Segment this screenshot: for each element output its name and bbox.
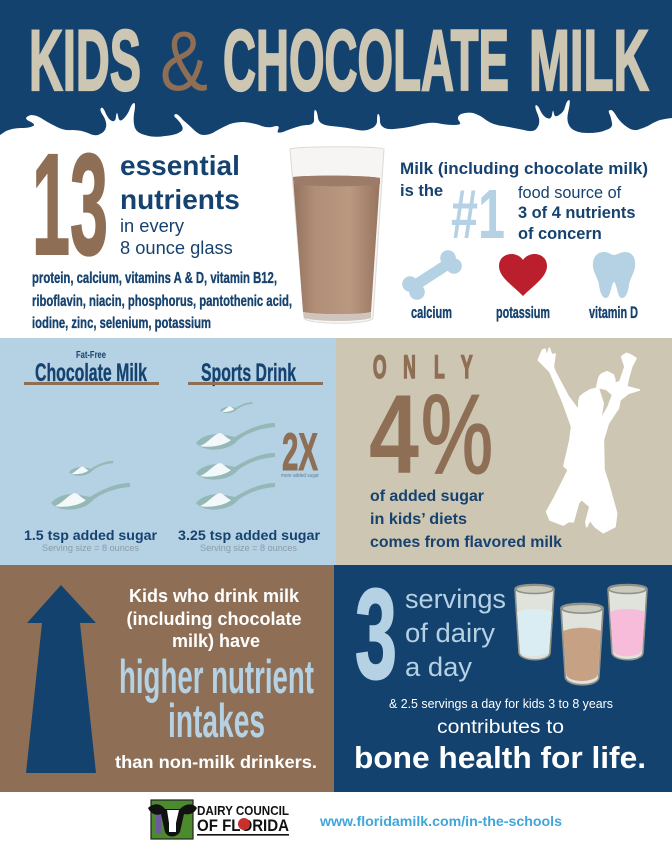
- text: serving note: & 2.5 servings a day for kids 3 to 8 years: [389, 697, 613, 711]
- panel: 13 essential nutrients: 13: [32, 124, 108, 285]
- text: kids who drink milk: (including chocolate: [126, 609, 302, 629]
- subheading: in every 8 ounce glass: [120, 215, 233, 258]
- text: contributes to: contributes to: [437, 717, 564, 738]
- text: added sugar statement: [370, 488, 562, 551]
- icon: up arrow: [26, 585, 96, 773]
- logo: Dairy Council of Florida: [148, 800, 289, 839]
- panel: number one food source: [400, 160, 648, 322]
- logo: Dairy Council of Florida: OF FLORIDA: [197, 816, 289, 835]
- icon: glass of strawberry milk: [608, 584, 647, 660]
- nutrient list: protein, calcium, vitamins A & D, vitamin B12,: [32, 270, 277, 287]
- callout: 2X more added sugar: more added sugar: [281, 473, 319, 479]
- heading: only: ONLY: [373, 351, 473, 385]
- logo: Dairy Council of Florida: DAIRY COUNCIL: [197, 803, 289, 818]
- label: potassium: potassium: [496, 304, 550, 322]
- heading: chocolate milk: Fat-Free: [76, 349, 106, 361]
- callout text: milk is the: [400, 160, 648, 200]
- title: [29, 13, 649, 109]
- heading: chocolate milk: [24, 349, 159, 387]
- text: servings of dairy a day: of dairy: [405, 618, 496, 648]
- highlight: higher nutrient intakes: higher nutrient: [119, 650, 314, 703]
- callout: 2X more added sugar: 2X: [282, 423, 318, 482]
- text: 1.5 tsp: Serving size = 8 ounces: [42, 543, 139, 554]
- text: 3.25 tsp: Serving size = 8 ounces: [200, 543, 297, 554]
- nutrient list: [32, 270, 292, 332]
- heading: essential nutrients: [120, 150, 240, 215]
- subheading: in every 8 ounce glass: 8 ounce glass: [120, 237, 233, 258]
- text: servings of dairy a day: servings: [405, 584, 506, 614]
- text: added sugar statement: in kids’ diets: [370, 511, 467, 528]
- icon: sports drink spoons: [196, 402, 275, 510]
- text: kids who drink milk: Kids who drink milk: [129, 586, 300, 606]
- header banner: [0, 0, 672, 142]
- callout: 2X more added sugar: [281, 423, 319, 482]
- text: servings of dairy a day: [405, 584, 506, 682]
- icon: chocolate milk spoons: [51, 461, 130, 510]
- callout text: milk is the: is the: [400, 182, 443, 200]
- panel: only 4 percent: [336, 338, 672, 565]
- subheading: in every 8 ounce glass: in every: [120, 215, 185, 236]
- text: servings of dairy a day: a day: [405, 652, 472, 682]
- highlight: bone health for life: bone health for life.: [354, 740, 646, 775]
- big number 4%: 4: [369, 372, 419, 497]
- panel: higher nutrient intakes: [0, 565, 334, 792]
- callout text: food source: 3 of 4 nutrients: [518, 204, 635, 222]
- big number 4%: %: [421, 372, 493, 497]
- footer url: www.floridamilk.com/in-the-schools: [319, 814, 562, 829]
- callout text: food source: food source of: [518, 184, 622, 202]
- icon: heart: [499, 254, 547, 296]
- panel: 13 essential nutrients: [32, 124, 292, 332]
- milk splash edge: [0, 100, 672, 142]
- text: 1.5 tsp: 1.5 tsp added sugar: [24, 528, 158, 543]
- text: than non-milk drinkers: than non-milk drinkers.: [115, 752, 317, 772]
- highlight: higher nutrient intakes: [119, 650, 314, 747]
- highlight: higher nutrient intakes: intakes: [168, 694, 265, 747]
- icon: jumping child silhouette: [538, 348, 639, 533]
- nutrient list: iodine, zinc, selenium, potassium: [32, 315, 211, 332]
- chocolate milk glass: [290, 147, 384, 323]
- text: 3.25 tsp: [178, 528, 321, 554]
- text: added sugar statement: of added sugar: [370, 488, 484, 505]
- big number 4%: [369, 372, 493, 497]
- big #1: #1: [451, 175, 505, 253]
- heading: essential nutrients: nutrients: [120, 184, 240, 215]
- title: KIDS: [29, 13, 141, 109]
- callout text: food source: [518, 184, 635, 243]
- label: calcium: calcium: [411, 304, 452, 322]
- nutrient list: riboflavin, niacin, phosphorus, pantothenic acid,: [32, 293, 292, 310]
- panel: added sugar comparison: [0, 338, 336, 565]
- icon: bone: [402, 250, 462, 300]
- text: 1.5 tsp: [24, 528, 158, 554]
- heading: chocolate milk: Chocolate Milk: [35, 359, 147, 387]
- text: kids who drink milk: milk) have: [172, 631, 260, 651]
- title: &: [160, 14, 208, 108]
- callout text: milk is the: Milk (including chocolate milk): [400, 160, 648, 178]
- heading: essential nutrients: essential: [120, 150, 240, 181]
- callout text: food source: of concern: [518, 225, 602, 243]
- text: kids who drink milk: [126, 586, 302, 651]
- panel: 3 servings of dairy: [334, 563, 672, 792]
- label: vitamin D: vitamin D: [589, 304, 638, 322]
- big number 3: 3: [355, 563, 397, 706]
- heading: sports drink: Sports Drink: [201, 359, 296, 387]
- icon: tooth: [593, 252, 635, 298]
- icon: glass of chocolate milk: [561, 603, 603, 685]
- icon: glass of milk: [515, 584, 554, 660]
- text: 3.25 tsp: 3.25 tsp added sugar: [178, 528, 321, 543]
- text: added sugar statement: comes from flavored milk: [370, 534, 562, 551]
